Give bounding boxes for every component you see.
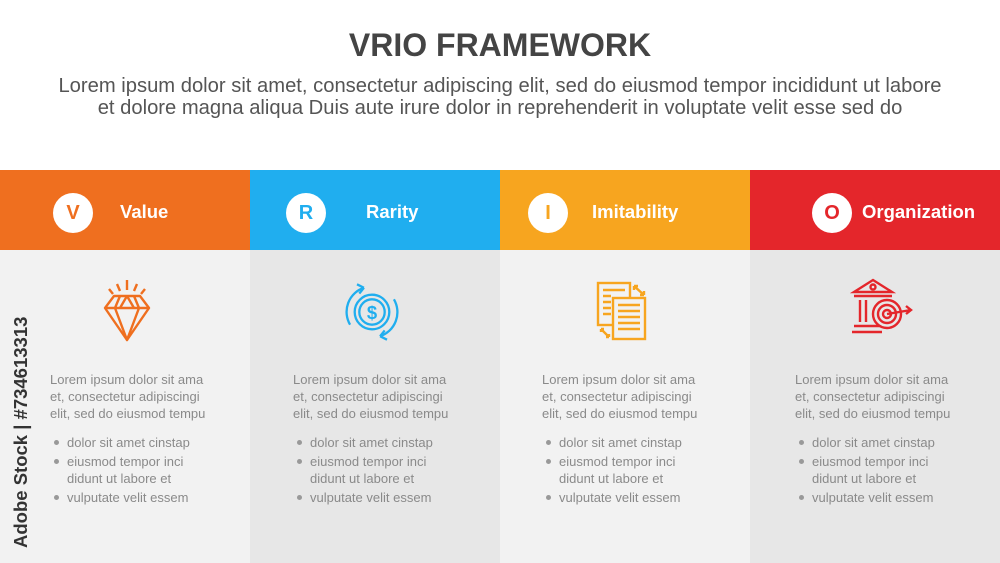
icon: dollar cycle <box>345 283 399 341</box>
text: value: Lorem ipsum dolor sit ama <box>50 372 203 387</box>
text: value: vulputate velit essem <box>67 490 188 505</box>
header: imitability <box>500 170 750 250</box>
text: value <box>50 372 205 505</box>
label Organization: Organization <box>862 201 975 222</box>
circle O <box>812 193 852 233</box>
text: organization: dolor sit amet cinstap <box>812 435 935 450</box>
text: imitability: et, consectetur adipiscingi <box>542 389 692 404</box>
text: organization: Lorem ipsum dolor sit ama <box>795 372 948 387</box>
text: organization <box>795 372 950 505</box>
circle V: V <box>66 202 80 224</box>
circle I <box>528 193 568 233</box>
header: organization <box>750 170 1000 250</box>
column backgrounds <box>0 250 250 563</box>
title: VRIO FRAMEWORK <box>349 27 651 63</box>
text: rarity: vulputate velit essem <box>310 490 431 505</box>
circle R <box>286 193 326 233</box>
text: imitability: Lorem ipsum dolor sit ama <box>542 372 695 387</box>
watermark id: Adobe Stock | #734613313 <box>10 317 31 548</box>
text: rarity <box>293 372 448 505</box>
icon: diamond <box>104 280 150 342</box>
text: imitability: vulputate velit essem <box>559 490 680 505</box>
icon: documents <box>596 282 646 340</box>
text: organization: eiusmod tempor inci <box>812 454 928 469</box>
text: value: dolor sit amet cinstap <box>67 435 190 450</box>
text: organization: vulputate velit essem <box>812 490 933 505</box>
subtitle: et dolore magna aliqua Duis aute irure dolor in reprehenderit in voluptate velit esse sed do <box>98 97 902 119</box>
text: rarity: et, consectetur adipiscingi <box>293 389 443 404</box>
text: rarity: didunt ut labore et <box>310 471 414 486</box>
text: rarity: eiusmod tempor inci <box>310 454 426 469</box>
circle R: R <box>299 202 313 224</box>
circle O: O <box>824 202 840 224</box>
text: imitability: dolor sit amet cinstap <box>559 435 682 450</box>
text: rarity: elit, sed do eiusmod tempu <box>293 406 448 421</box>
circle V <box>53 193 93 233</box>
icon: dollar cycle: $ <box>367 302 377 323</box>
icon: bank target <box>850 278 913 334</box>
label Value: Value <box>120 201 168 222</box>
header: rarity <box>250 170 500 250</box>
text: value: didunt ut labore et <box>67 471 171 486</box>
subtitle: Lorem ipsum dolor sit amet, consectetur adipiscing elit, sed do eiusmod tempor incididunt ut labore <box>58 75 942 97</box>
text: imitability: elit, sed do eiusmod tempu <box>542 406 697 421</box>
text: value: eiusmod tempor inci <box>67 454 183 469</box>
text: rarity: Lorem ipsum dolor sit ama <box>293 372 446 387</box>
text: value: et, consectetur adipiscingi <box>50 389 200 404</box>
circle I: I <box>545 202 551 224</box>
text: imitability: eiusmod tempor inci <box>559 454 675 469</box>
text: organization: didunt ut labore et <box>812 471 916 486</box>
text: organization: et, consectetur adipiscingi <box>795 389 945 404</box>
text: organization: elit, sed do eiusmod tempu <box>795 406 950 421</box>
label Rarity: Rarity <box>366 201 418 222</box>
text: rarity: dolor sit amet cinstap <box>310 435 433 450</box>
subtitle <box>58 75 942 119</box>
header: value <box>0 170 250 250</box>
text: imitability: didunt ut labore et <box>559 471 663 486</box>
text: imitability <box>542 372 697 505</box>
text: value: elit, sed do eiusmod tempu <box>50 406 205 421</box>
label Imitability: Imitability <box>592 201 678 222</box>
